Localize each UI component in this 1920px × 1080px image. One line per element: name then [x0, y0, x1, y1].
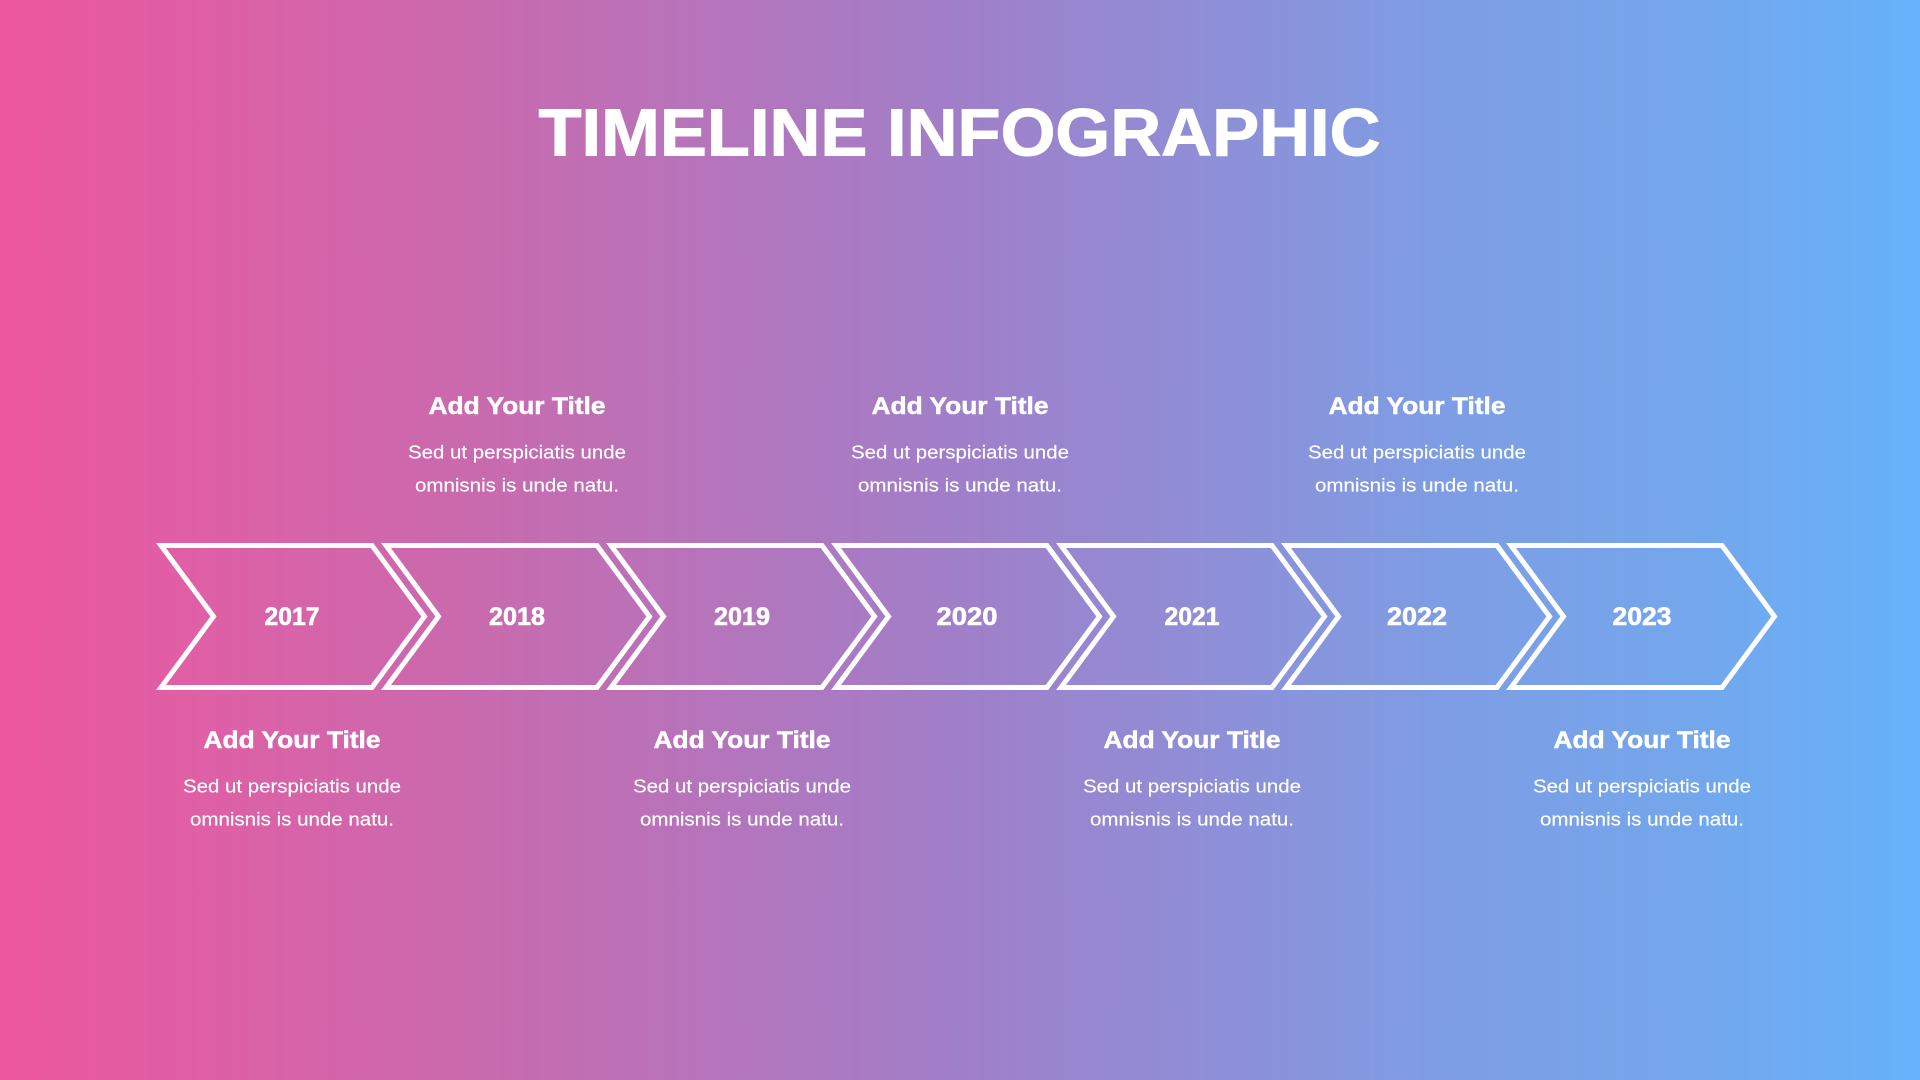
- text block 2023: omnisnis is unde natu.: [1540, 810, 1744, 830]
- chevron 2020: [836, 546, 1100, 688]
- text block 2022: Add Your Title: [1328, 393, 1506, 420]
- chevron 2021: 2021: [1164, 603, 1220, 631]
- text block 2023: [1533, 727, 1751, 830]
- text block 2021: Add Your Title: [1104, 727, 1280, 754]
- chevron 2017: [161, 546, 424, 688]
- text block 2018: omnisnis is unde natu.: [415, 476, 619, 496]
- text block 2022: Sed ut perspiciatis unde: [1308, 442, 1526, 462]
- chevron 2020: 2020: [936, 603, 998, 631]
- text block 2017: [183, 727, 401, 830]
- text block 2020: Sed ut perspiciatis unde: [851, 442, 1069, 462]
- text block 2018: Add Your Title: [428, 393, 606, 420]
- text block 2019: omnisnis is unde natu.: [640, 810, 844, 830]
- text block 2021: omnisnis is unde natu.: [1090, 810, 1294, 830]
- text block 2019: Add Your Title: [654, 727, 830, 754]
- text block 2023: Add Your Title: [1554, 727, 1730, 754]
- text block 2020: Add Your Title: [872, 393, 1048, 420]
- chevron 2017: 2017: [264, 603, 320, 631]
- text block 2019: [633, 727, 851, 830]
- text block 2021: Sed ut perspiciatis unde: [1083, 776, 1301, 796]
- text block 2020: [851, 393, 1069, 496]
- text block 2018: [408, 393, 626, 496]
- text block 2019: Sed ut perspiciatis unde: [633, 776, 851, 796]
- chevron 2022: [1286, 546, 1550, 688]
- text block 2022: [1308, 393, 1526, 496]
- text block 2017: omnisnis is unde natu.: [190, 810, 394, 830]
- chevron 2019: [611, 546, 874, 688]
- chevron 2023: [1511, 546, 1774, 688]
- chevron 2018: [386, 546, 650, 688]
- text block 2018: Sed ut perspiciatis unde: [408, 442, 626, 462]
- chevron 2019: 2019: [714, 603, 770, 631]
- chevron 2018: 2018: [489, 603, 545, 631]
- title: TIMELINE INFOGRAPHIC: [538, 96, 1380, 170]
- chevron 2023: 2023: [1612, 603, 1672, 631]
- timeline chevrons: [161, 546, 1774, 688]
- chevron 2022: 2022: [1387, 603, 1447, 631]
- text block 2017: Add Your Title: [204, 727, 380, 754]
- text block 2022: omnisnis is unde natu.: [1315, 476, 1519, 496]
- text block 2017: Sed ut perspiciatis unde: [183, 776, 401, 796]
- text block 2023: Sed ut perspiciatis unde: [1533, 776, 1751, 796]
- chevron 2021: [1061, 546, 1324, 688]
- text block 2020: omnisnis is unde natu.: [858, 476, 1062, 496]
- text block 2021: [1083, 727, 1301, 830]
